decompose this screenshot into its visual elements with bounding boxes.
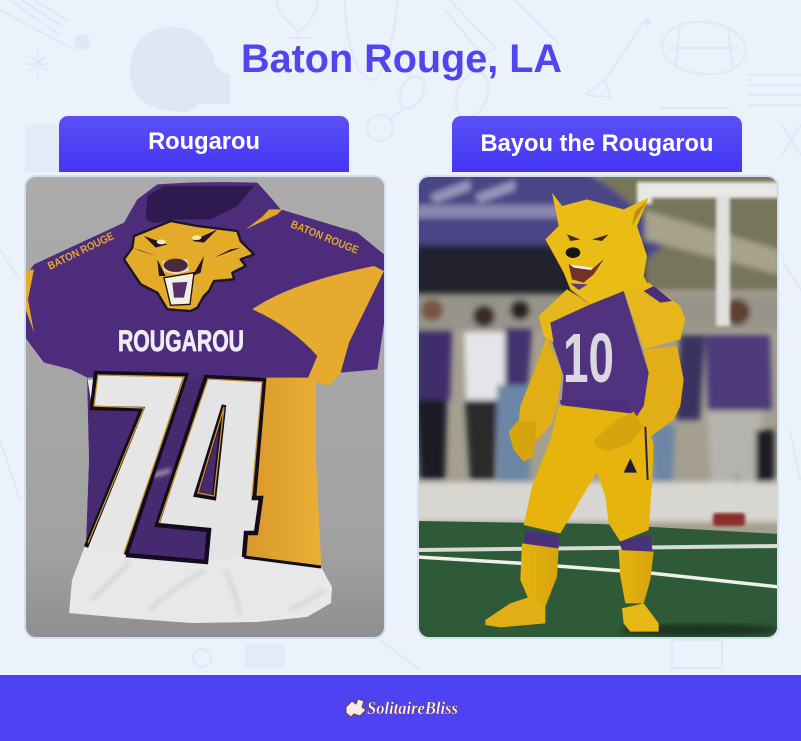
tab: Rougarou: Rougarou (148, 129, 260, 155)
wolf logo (124, 221, 254, 311)
footer bar (0, 675, 801, 741)
tab: Bayou the Rougarou: Bayou the Rougarou (481, 131, 713, 157)
panel: jersey (24, 175, 386, 639)
jersey lettering: ROUGAROU (118, 325, 244, 358)
jersey shirt body (24, 182, 386, 623)
mascot (517, 193, 685, 439)
tab: Rougarou (59, 116, 349, 172)
tab: Bayou the Rougarou (452, 116, 742, 172)
stadium background (410, 170, 790, 640)
jersey lettering: BATON ROUGE (46, 230, 116, 273)
mascot jersey (550, 291, 649, 426)
jersey lettering (46, 219, 360, 358)
jersey lettering: BATON ROUGE (289, 219, 360, 257)
number 74 (86, 373, 321, 567)
panel: mascot (417, 175, 779, 639)
mascot arms (517, 336, 684, 439)
mascot pants and legs (485, 400, 659, 632)
mascot head (545, 193, 649, 304)
title: Baton Rouge, LA (241, 37, 562, 81)
mascot jersey number: 10 (563, 319, 614, 397)
